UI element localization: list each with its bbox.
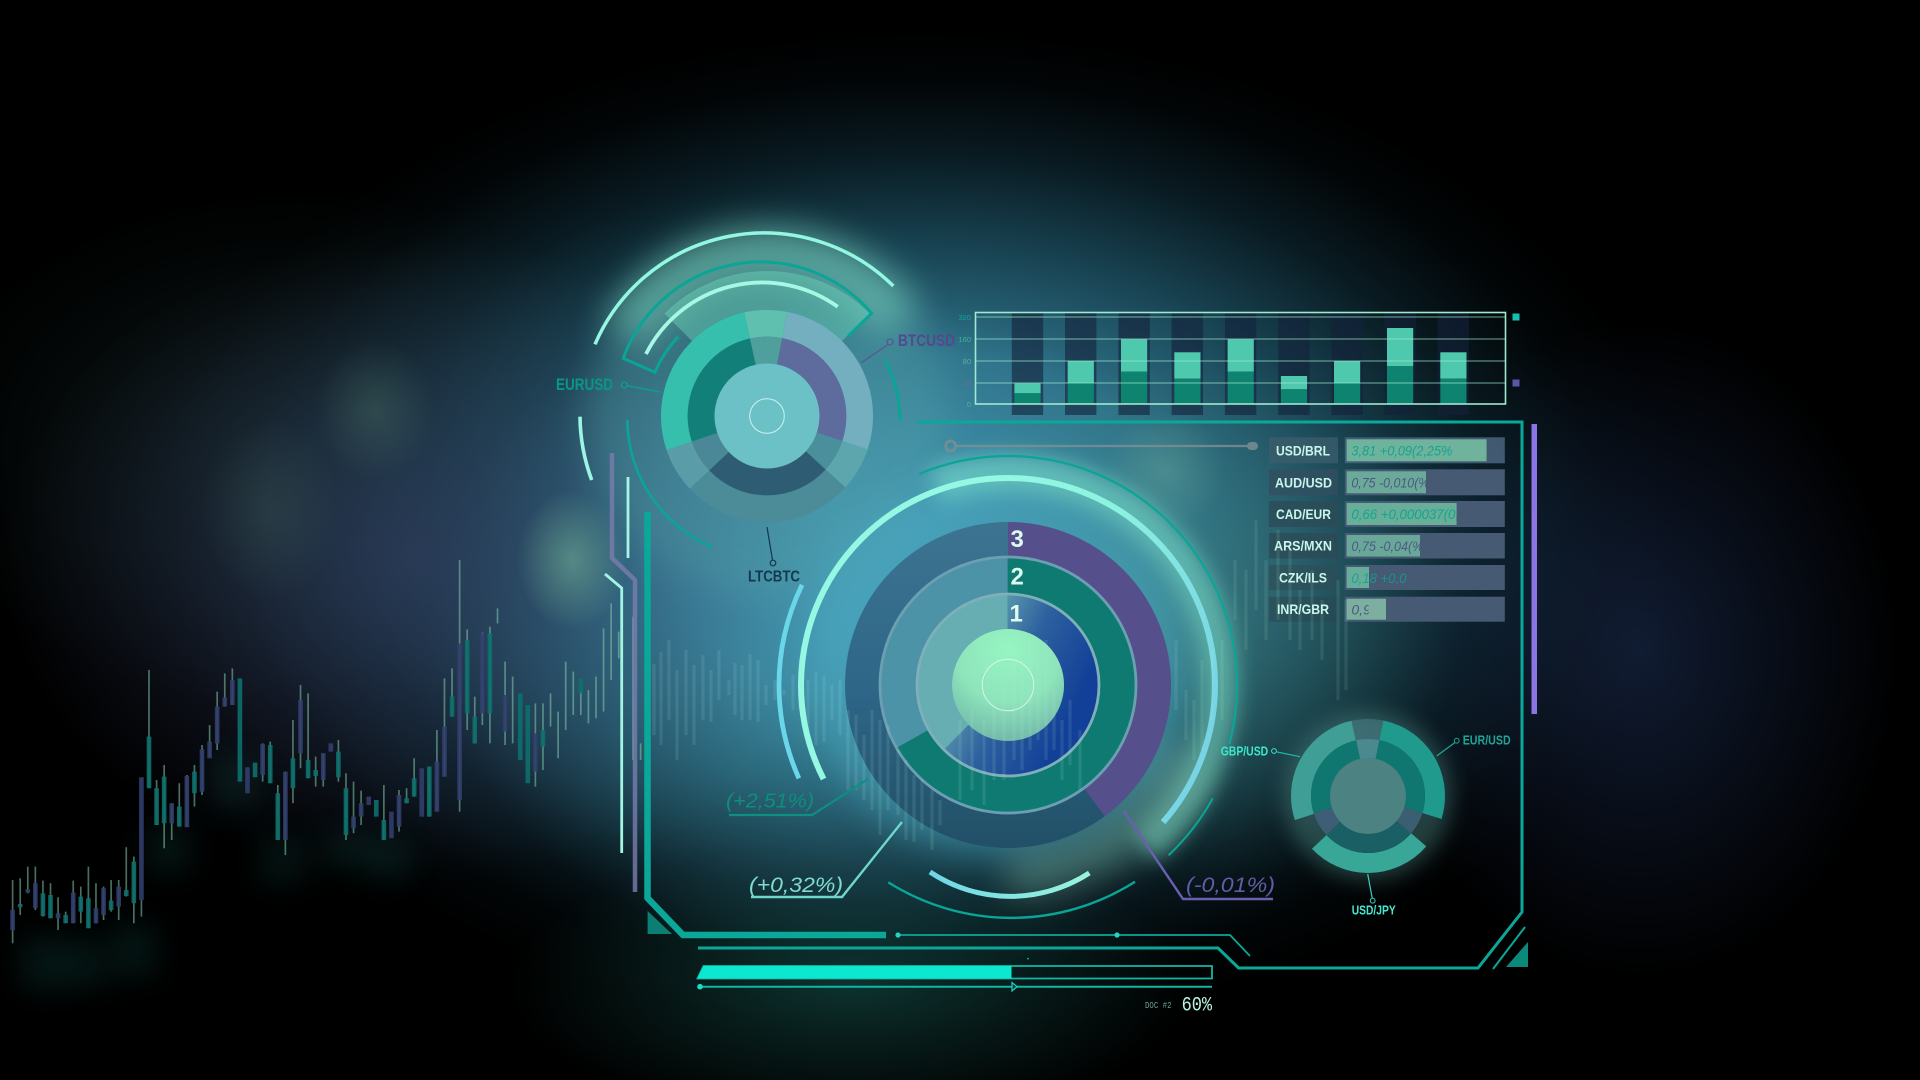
- chart axis labels: [958, 313, 971, 409]
- ring rims: [880, 557, 1136, 813]
- callout: EURUSD: [556, 375, 660, 394]
- callout: -0,01%: (-0,01%): [1186, 873, 1275, 897]
- centre disc: [714, 364, 820, 468]
- progress label: [1145, 994, 1213, 1018]
- ring 1: [934, 612, 1082, 758]
- row CAD/EUR: [1269, 501, 1505, 527]
- inner ring segments: [701, 350, 833, 482]
- callout: +2,51%: (+2,51%): [726, 790, 814, 813]
- purple side bar: [1532, 424, 1537, 714]
- ring numbers: 3: [1010, 526, 1024, 553]
- candlestick overlay: faint wicks: [654, 520, 1346, 850]
- outer guide arcs: [774, 451, 1242, 919]
- callout: +2,51%: [726, 779, 868, 815]
- row AUD/USD: AUD/USD: [1275, 474, 1332, 490]
- chart axis labels: 320: [958, 313, 971, 322]
- callout: LTCBTC: [748, 527, 800, 586]
- centre disc: [952, 629, 1064, 741]
- progress bar: [697, 966, 1212, 991]
- centre disc: [1330, 758, 1406, 834]
- progress label: DOC #2: [1145, 1001, 1172, 1011]
- donut chart: top: [580, 233, 900, 547]
- callout: EUR/USD: EUR/USD: [1463, 734, 1511, 748]
- row CZK/ILS: [1269, 565, 1505, 590]
- candlestick chart: left: [13, 560, 641, 990]
- ring numbers: [1010, 526, 1024, 628]
- outer ring segments: [1301, 729, 1435, 863]
- halo: large donut: [796, 473, 1220, 897]
- ring 3: [862, 540, 1154, 830]
- donut chart: large: [774, 451, 1242, 919]
- chart bars lower: [1014, 366, 1466, 404]
- callout: -0,01%: [1123, 810, 1275, 899]
- row INR/GBR: [1269, 597, 1505, 622]
- row INR/GBR: INR/GBR: [1277, 601, 1329, 617]
- callout: +0,32%: [749, 822, 902, 897]
- table: currency pairs: [1269, 437, 1505, 622]
- callout: BTCUSD: BTCUSD: [898, 331, 955, 350]
- decorative left rails: [605, 453, 635, 892]
- callout: EUR/USD: [1437, 734, 1511, 756]
- row ARS/MXN: ARS/MXN: [1274, 538, 1332, 554]
- callout: USD/JPY: USD/JPY: [1352, 904, 1396, 918]
- bar chart: [958, 312, 1520, 415]
- inner ring segments: [1320, 748, 1416, 844]
- callout: +0,32%: (+0,32%): [749, 873, 843, 897]
- row USD/BRL: [1269, 437, 1505, 463]
- chart bars upper: [1014, 328, 1466, 393]
- chart columns: [1012, 313, 1469, 415]
- row CZK/ILS: CZK/ILS: [1279, 570, 1327, 586]
- chart frame and grid: [976, 312, 1506, 404]
- panel frame: [648, 422, 1525, 969]
- chart axis labels: 40: [963, 379, 971, 388]
- ring numbers: 1: [1010, 600, 1023, 628]
- row CAD/EUR: CAD/EUR: [1276, 506, 1331, 522]
- chart axis labels: 80: [963, 357, 971, 366]
- callout: EURUSD: EURUSD: [556, 375, 613, 394]
- row USD/BRL: USD/BRL: [1276, 442, 1330, 458]
- outer ring segments: [674, 323, 860, 509]
- callout: LTCBTC: LTCBTC: [748, 568, 800, 586]
- chart axis labels: 160: [958, 335, 971, 344]
- callout: USD/JPY: [1352, 874, 1396, 918]
- callout: BTCUSD: [861, 331, 955, 363]
- frame corner triangles and nodes: [648, 911, 1528, 967]
- chart legend markers: [1512, 314, 1520, 386]
- top arcs: [580, 233, 900, 547]
- row ARS/MXN: [1269, 533, 1505, 558]
- callout: GBP/USD: GBP/USD: [1221, 744, 1268, 758]
- row INR/GBR: 0,9: [1351, 602, 1371, 618]
- chart axis labels: 0: [967, 400, 971, 409]
- ring numbers: 2: [1010, 564, 1024, 590]
- halo: top donut: [587, 236, 947, 596]
- row AUD/USD: [1269, 469, 1505, 495]
- progress label: 60%: [1182, 994, 1213, 1018]
- halo: small donut: [1284, 712, 1452, 880]
- ring 2: [898, 576, 1118, 794]
- slider: [946, 441, 1258, 451]
- donut chart: small: [1301, 729, 1435, 863]
